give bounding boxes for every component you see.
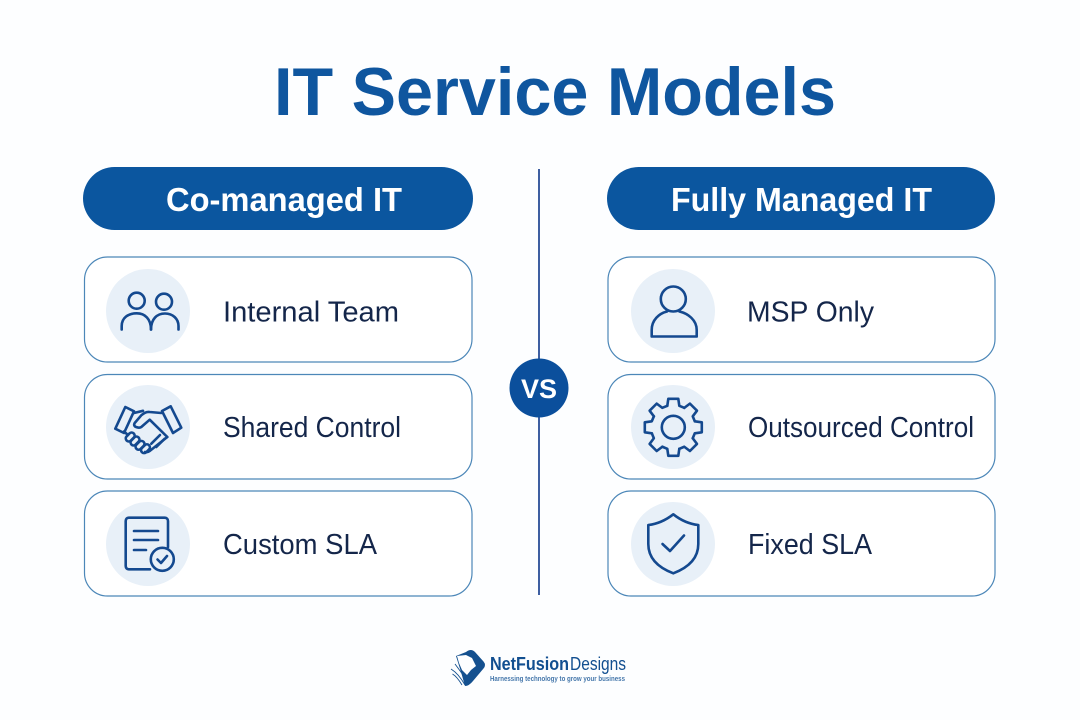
icon: shield with check xyxy=(648,514,698,573)
icon: gear xyxy=(645,399,702,456)
card: MSP only xyxy=(608,257,995,362)
card: fixed SLA xyxy=(608,491,995,596)
card: outsourced control: Outsourced Control xyxy=(748,412,974,444)
icon: two people xyxy=(122,293,178,330)
icon: document with check xyxy=(126,518,174,571)
card: internal team: Internal Team xyxy=(223,296,399,328)
card: outsourced control xyxy=(608,374,995,479)
icon: single person xyxy=(652,286,697,336)
icon: handshake xyxy=(115,406,181,454)
card: fixed SLA: Fixed SLA xyxy=(748,529,872,561)
panel: fully managed IT xyxy=(607,167,995,596)
card: shared control: Shared Control xyxy=(223,412,401,444)
card: custom SLA: Custom SLA xyxy=(223,529,377,561)
divider line xyxy=(538,169,540,595)
tagline: Harnessing technology to grow your business xyxy=(490,674,625,683)
heading: fully managed IT: Fully Managed IT xyxy=(671,181,932,218)
panel: co-managed IT xyxy=(83,167,473,596)
icon: lion badge xyxy=(451,650,485,686)
title: IT Service Models xyxy=(274,54,836,130)
heading: co-managed IT xyxy=(83,167,473,230)
card: custom SLA xyxy=(84,491,472,596)
heading: fully managed IT xyxy=(607,167,995,230)
VS badge xyxy=(510,358,568,418)
wordmark xyxy=(490,654,626,674)
card: internal team xyxy=(84,257,472,362)
VS badge: VS xyxy=(521,374,557,404)
card: MSP only: MSP Only xyxy=(747,296,875,328)
heading: co-managed IT: Co-managed IT xyxy=(166,181,402,218)
wordmark: NetFusion xyxy=(490,654,569,674)
logo: NetFusion Designs xyxy=(451,650,626,686)
card: shared control xyxy=(84,374,472,479)
wordmark: Designs xyxy=(570,654,626,674)
